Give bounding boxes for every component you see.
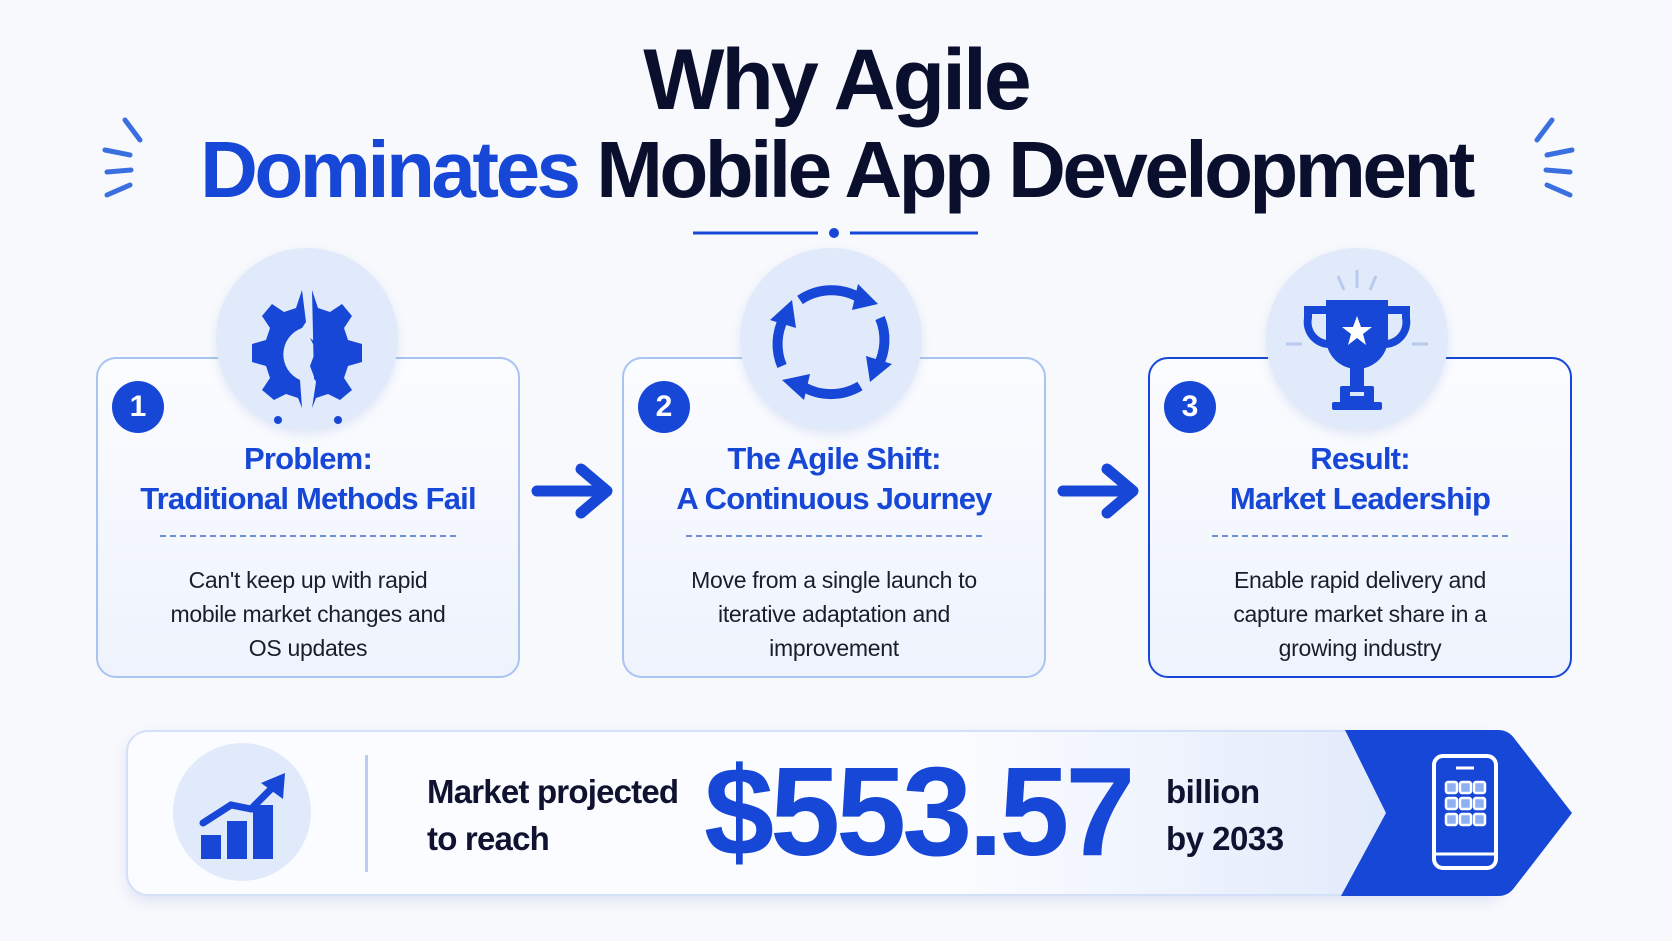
stat: amount: $553.57 [704,741,1131,882]
panel: problem [96,357,520,678]
icon: cycle arrows [740,248,922,430]
panel: agile shift: A Continuous Journey [676,481,992,516]
panel: agile shift [622,357,1046,678]
panel: result [1148,357,1572,678]
title [200,32,1474,214]
panel: problem: Can't keep up with rapid [189,567,427,593]
icon: growth chart [173,743,311,881]
divider [365,755,368,872]
panel: problem: Problem: [244,441,372,476]
panel: problem: mobile market changes and [170,601,446,627]
text: market projected: to reach [427,820,549,857]
decoration: left rays [102,118,142,198]
panel: agile shift: improvement [769,635,899,661]
panel: result: capture market share in a [1233,601,1487,627]
panel: result: 3 [1182,390,1198,423]
panel: result: Market Leadership [1230,481,1490,516]
arrow 1 [532,464,612,518]
panel: problem: 1 [130,390,146,423]
panel: agile shift: iterative adaptation and [718,601,950,627]
arrow 2 [1058,464,1138,518]
chevron: phone block [1341,730,1572,896]
title: Why Agile [643,32,1029,128]
icon: phone [1434,756,1496,868]
text: market projected: Market projected [427,773,678,810]
text: billion by 2033: by 2033 [1166,820,1284,857]
text: billion by 2033 [1166,773,1284,857]
icon: trophy [1266,248,1448,430]
panel: problem: Traditional Methods Fail [140,481,476,516]
text: billion by 2033: billion [1166,773,1260,810]
icon: broken gear [216,248,398,430]
title: Dominates Mobile App Development [200,125,1472,214]
panel: problem: OS updates [249,635,367,661]
panel: agile shift: 2 [656,390,672,423]
panel: agile shift: The Agile Shift: [727,441,941,476]
panel: agile shift: Move from a single launch to [691,567,977,593]
panel: result: Result: [1310,441,1410,476]
panel: result: Enable rapid delivery and [1234,567,1486,593]
text: market projected [427,773,678,857]
banner: market projection [122,730,1572,906]
decoration: right rays [1534,118,1574,198]
panel: result: growing industry [1279,635,1441,661]
title underline [693,228,978,238]
